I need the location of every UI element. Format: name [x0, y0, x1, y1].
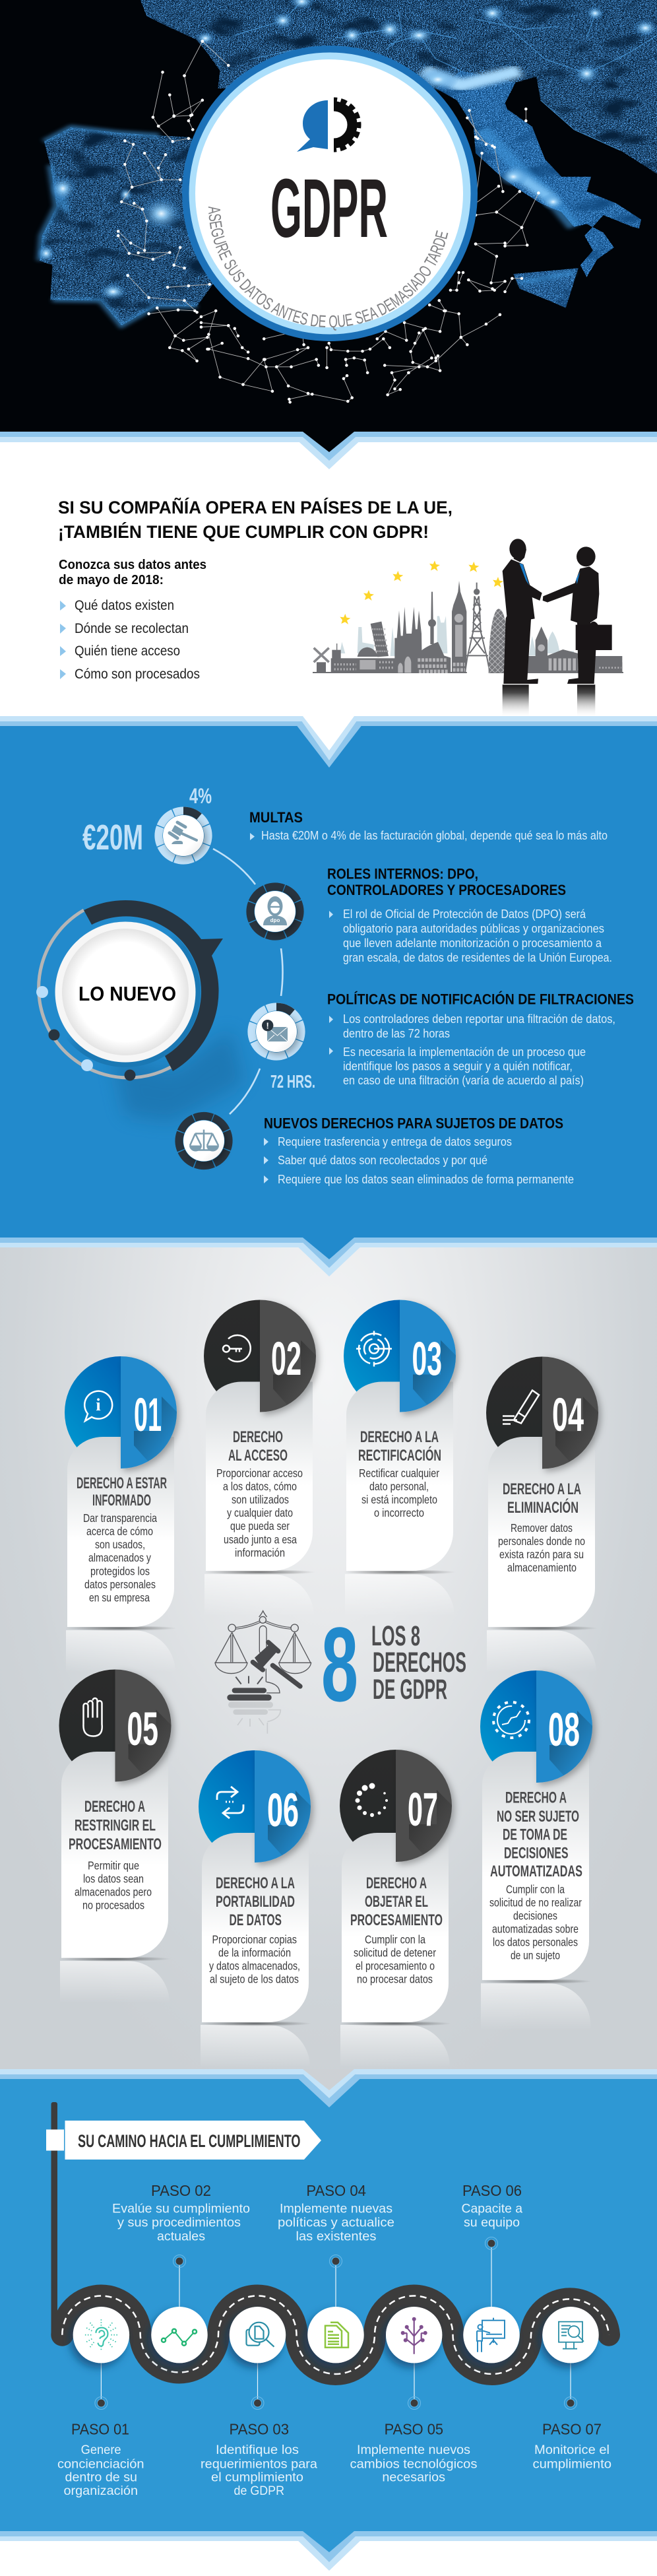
heading: los 8 derechos de gdpr: DERECHOS	[373, 1647, 466, 1678]
card 04: DERECHO A LA	[503, 1480, 581, 1498]
dark skyline buildings	[313, 581, 623, 673]
step 5 icon: circuit tree	[386, 2307, 442, 2363]
text: roles internos: El rol de Oficial de Protección de Datos (DPO) será	[343, 908, 586, 921]
card 06: DE DATOS	[230, 1911, 282, 1929]
step 1 text: dentro de su	[65, 2470, 137, 2484]
card 08: automatizadas sobre	[492, 1922, 579, 1935]
step 4 text: Implemente nuevas	[280, 2202, 392, 2216]
icon: scales and gavel	[215, 1611, 311, 1734]
card 08: DE TOMA DE	[503, 1826, 567, 1844]
text: politicas de notificacion	[327, 991, 634, 1087]
card 08: 08	[548, 1704, 580, 1756]
icon: dpo ring: dpo	[270, 917, 280, 923]
tie left	[519, 563, 529, 585]
central badge: GDPR	[270, 162, 388, 255]
card 01: almacenados y	[88, 1551, 151, 1564]
stars	[340, 560, 503, 624]
72 hours label: 72 HRS.	[270, 1071, 315, 1092]
icon: key	[223, 1335, 251, 1362]
icon: raised hand	[83, 1698, 102, 1736]
hero panel: night map of Europe	[0, 0, 657, 436]
text: roles internos: gran escala, de datos de residentes de la Unión Europea.	[343, 951, 612, 964]
icon: gear and trend	[493, 1702, 529, 1738]
heading: los 8 derechos de gdpr: DE GDPR	[373, 1674, 447, 1705]
step 2 text: Evalúe su cumplimiento	[112, 2202, 250, 2216]
card 04: almacenamiento	[507, 1561, 577, 1574]
text: roles internos	[327, 866, 612, 964]
briefcase	[576, 622, 612, 650]
step 1 text: concienciación	[57, 2457, 144, 2471]
step 4 icon: documents	[307, 2307, 364, 2363]
intro subheading: de mayo de 2018:	[59, 573, 164, 587]
text: nuevos derechos	[264, 1115, 574, 1186]
card 04: personales donde no	[498, 1535, 585, 1548]
card 01: Dar transparencia	[83, 1511, 157, 1525]
text: nuevos derechos: Saber qué datos son recolectados y por qué	[278, 1154, 487, 1167]
big number 8: 8	[321, 1605, 358, 1723]
card 06: de la información	[218, 1946, 291, 1959]
icon: scales ring	[172, 1109, 236, 1173]
card 07: DERECHO A	[366, 1874, 427, 1892]
text: roles internos: que lleven adelante monitorización o procesamiento a	[343, 937, 602, 950]
text: politicas de notificacion: dentro de las 72 horas	[343, 1027, 450, 1040]
step 6 text: Capacite a	[462, 2202, 522, 2216]
panel: lo nuevo background	[0, 719, 657, 1247]
card 01: i	[96, 1395, 101, 1414]
icon: gavel ring	[151, 803, 216, 868]
banner: su camino: SU CAMINO HACIA EL CUMPLIMIENTO	[78, 2131, 301, 2151]
card 01: DERECHO A ESTAR	[77, 1474, 167, 1492]
card 05: RESTRINGIR EL	[75, 1817, 156, 1835]
step 5 text: Implemente nuevos	[357, 2443, 470, 2457]
card 01: en su empresa	[89, 1591, 150, 1604]
card 04: Remover datos	[511, 1521, 573, 1535]
card 01: INFORMADO	[92, 1492, 151, 1509]
footer divider	[0, 2531, 657, 2576]
central badge: ASEGURE SUS DATOS ANTES DE QUE SEA DEMASIADO TARDE	[208, 206, 449, 331]
card 02: usado junto a esa	[224, 1533, 297, 1546]
map of lit land masses	[37, 0, 657, 325]
card 01	[65, 1356, 179, 1672]
text: roles internos: CONTROLADORES Y PROCESADORES	[327, 882, 566, 898]
step 3 text: requerimientos para	[201, 2457, 317, 2471]
card 02: DERECHO	[233, 1428, 283, 1446]
card 04: ELIMINACIÓN	[507, 1498, 579, 1517]
card 03: DERECHO A LA	[360, 1428, 439, 1446]
step 1 icon: ear	[73, 2307, 129, 2363]
step 5 text: necesarios	[382, 2470, 445, 2484]
card 03: RECTIFICACIÓN	[358, 1446, 441, 1465]
icon: transfer arrows	[217, 1787, 243, 1818]
card 05: DERECHO A	[84, 1798, 145, 1816]
step 6 icon: presenter	[463, 2307, 520, 2363]
step 1 text	[57, 2420, 144, 2498]
icon: target	[356, 1331, 392, 1366]
businessman right	[543, 546, 599, 684]
intro checklist: Cómo son procesados	[75, 667, 200, 682]
step 2 text: PASO 02	[151, 2182, 211, 2199]
businessman left	[503, 539, 542, 684]
text: multas: Hasta €20M o 4% de las facturación global, depende qué sea lo más alto	[261, 829, 608, 842]
icon: dpo ring	[243, 879, 307, 944]
card 02: información	[235, 1546, 285, 1559]
card 03: 03	[412, 1333, 442, 1385]
step 2 text: actuales	[157, 2229, 205, 2244]
step 1 text: organización	[63, 2484, 138, 2498]
card 07: solicitud de detener	[354, 1946, 436, 1959]
card 02: AL ACCESO	[228, 1447, 288, 1465]
card 02: son utilizados	[232, 1493, 289, 1506]
card 05: almacenados pero	[75, 1885, 152, 1898]
panel: camino background	[0, 2078, 657, 2534]
card 03: Rectificar cualquier	[359, 1467, 439, 1480]
card 07: el procesamiento o	[356, 1959, 435, 1972]
card 01: datos personales	[84, 1577, 156, 1591]
step 4 text: PASO 04	[306, 2182, 366, 2199]
card 04	[485, 1357, 600, 1672]
intro subheading	[59, 558, 206, 587]
intro checklist	[60, 598, 200, 682]
intro checklist: Dónde se recolectan	[75, 621, 189, 636]
card 08: DECISIONES	[504, 1845, 569, 1863]
step 3 text	[201, 2420, 317, 2498]
text: roles internos: ROLES INTERNOS: DPO,	[327, 866, 478, 882]
card 03: si está incompleto	[361, 1493, 437, 1506]
step 5 text: cambios tecnológicos	[350, 2457, 478, 2471]
card 08: los datos personales	[493, 1935, 578, 1948]
card 02: a los datos, cómo	[223, 1480, 297, 1493]
card 01: acerca de cómo	[86, 1525, 153, 1538]
card 02: y cualquier dato	[227, 1506, 293, 1519]
step 3 icon: search document	[230, 2307, 286, 2363]
divider lo nuevo to derechos	[0, 1238, 657, 1276]
intro panel background	[0, 436, 657, 719]
card 06: y datos almacenados,	[209, 1959, 300, 1972]
step 3 text: el cumplimiento	[211, 2470, 303, 2484]
step 2 text	[112, 2182, 250, 2244]
logo: speech bubble and gear	[297, 100, 358, 152]
icon: eraser	[503, 1390, 539, 1424]
step 4 text: políticas y actualice	[278, 2216, 394, 2230]
heading: los 8 derechos de gdpr	[371, 1620, 466, 1705]
text: nuevos derechos: NUEVOS DERECHOS PARA SUJETOS DE DATOS	[264, 1115, 563, 1132]
card 05: 05	[127, 1703, 158, 1756]
step 6 text	[462, 2182, 522, 2230]
card 08: AUTOMATIZADAS	[490, 1863, 582, 1880]
step 4 text: las existentes	[296, 2229, 377, 2244]
card 07: PROCESAMIENTO	[350, 1911, 443, 1929]
network of connected points	[118, 41, 538, 402]
card 08: DERECHO A	[505, 1789, 567, 1807]
card 01: son usados,	[95, 1538, 145, 1551]
card 02	[203, 1300, 318, 1616]
card 03	[344, 1300, 458, 1616]
card 06: al sujeto de los datos	[210, 1972, 299, 1985]
text: multas: MULTAS	[249, 809, 303, 826]
intro heading: ¡TAMBIÉN TIENE QUE CUMPLIR CON GDPR!	[58, 521, 429, 542]
card 02: Proporcionar acceso	[216, 1467, 303, 1480]
text: politicas de notificacion: en caso de una filtración (varía de acuerdo al país)	[343, 1074, 584, 1087]
step 4 text	[278, 2182, 394, 2244]
text: multas	[249, 809, 608, 842]
step 7 text	[533, 2420, 611, 2471]
text: roles internos: obligatorio para autoridades públicas y organizaciones	[343, 922, 604, 935]
icon: info bubble	[84, 1391, 112, 1421]
card 06	[199, 1750, 313, 2068]
20M label: €20M	[82, 818, 143, 857]
card 07	[339, 1750, 454, 2068]
text: politicas de notificacion: identifique los pasos a seguir y a quién notificar,	[343, 1060, 573, 1073]
step 5 text: PASO 05	[385, 2420, 443, 2437]
step 7 icon: monitor	[542, 2307, 599, 2363]
dial: lo nuevo	[36, 900, 244, 1122]
floor reflection	[503, 684, 595, 717]
intro subheading: Conozca sus datos antes	[59, 558, 206, 572]
card 05: no procesados	[82, 1898, 144, 1911]
card 01: 01	[134, 1389, 162, 1441]
curved tagline	[208, 206, 451, 327]
card 02: 02	[271, 1333, 301, 1385]
eiffel tower lattice	[465, 583, 490, 673]
step 2 text: y sus procedimientos	[117, 2216, 241, 2230]
step 7 text: Monitorice el	[534, 2443, 610, 2457]
step 5 text	[350, 2420, 478, 2484]
card 08: decisiones	[513, 1909, 557, 1922]
step 6 text: PASO 06	[462, 2182, 522, 2199]
intro heading	[58, 497, 453, 542]
card 06: Proporcionar copias	[212, 1932, 297, 1946]
panel: los 8 derechos background	[0, 1246, 657, 2072]
4 percent label: 4%	[189, 784, 212, 808]
card 06: DERECHO A LA	[216, 1874, 295, 1892]
reflection of gavel base	[228, 1701, 280, 1734]
step 6 text: su equipo	[464, 2216, 520, 2230]
lighter details	[360, 614, 545, 673]
text: nuevos derechos: Requiere trasferencia y entrega de datos seguros	[278, 1135, 512, 1148]
card 04: exista razón para su	[499, 1548, 584, 1561]
gherkin tower	[489, 609, 509, 673]
intro checklist: Quién tiene acceso	[75, 644, 180, 659]
card 08: solicitud de no realizar	[489, 1896, 582, 1909]
light background buildings	[340, 616, 574, 656]
road with pole	[51, 2102, 609, 2374]
step 7 text: cumplimiento	[533, 2457, 611, 2471]
intro heading: SI SU COMPAÑÍA OPERA EN PAÍSES DE LA UE,	[58, 497, 453, 517]
step 7 text: PASO 07	[542, 2420, 602, 2437]
card 06: PORTABILIDAD	[216, 1893, 295, 1911]
card 01: protegidos los	[90, 1564, 150, 1577]
step 1 text: Genere	[81, 2443, 121, 2457]
divider derechos to camino	[0, 2069, 657, 2107]
card 07: 07	[408, 1784, 438, 1836]
divider intro to lo nuevo	[0, 716, 657, 768]
icon: mail ring	[244, 999, 309, 1064]
card 03: o incorrecto	[374, 1506, 424, 1519]
step 3 text: Identifique los	[216, 2443, 299, 2457]
step 3 text: de GDPR	[234, 2484, 284, 2498]
card 05: los datos sean	[83, 1872, 144, 1885]
banner: su camino	[46, 2121, 321, 2160]
card 03: dato personal,	[369, 1480, 429, 1493]
text: nuevos derechos: Requiere que los datos sean eliminados de forma permanente	[278, 1173, 574, 1186]
card 08: de un sujeto	[511, 1948, 560, 1962]
illustration: European skyline and handshake	[313, 539, 623, 717]
card 08: Cumplir con la	[506, 1882, 565, 1896]
text: politicas de notificacion: Los controladores deben reportar una filtración de datos,	[343, 1012, 615, 1026]
card 08	[480, 1670, 594, 2030]
dial: lo nuevo: LO NUEVO	[78, 982, 176, 1005]
card 07: OBJETAR EL	[365, 1893, 428, 1911]
card 07: Cumplir con la	[365, 1932, 425, 1946]
central badge	[182, 46, 478, 341]
card 06: 06	[267, 1785, 299, 1837]
card 05: PROCESAMIENTO	[69, 1835, 162, 1853]
card 05	[59, 1670, 173, 2003]
connector pins	[95, 2237, 577, 2409]
card 08: NO SER SUJETO	[497, 1808, 579, 1826]
step 2 icon: chart	[151, 2307, 208, 2363]
intro checklist: Qué datos existen	[75, 598, 174, 613]
step 3 text: PASO 03	[230, 2420, 289, 2437]
bright road-like light lines	[235, 1, 657, 150]
text: politicas de notificacion: Es necesaria la implementación de un proceso que	[343, 1045, 586, 1059]
heading: los 8 derechos de gdpr: LOS 8	[371, 1620, 420, 1652]
card 02: que pueda ser	[230, 1519, 290, 1533]
card 05: Permitir que	[88, 1859, 139, 1872]
tie right	[576, 572, 580, 584]
card 04: 04	[552, 1389, 584, 1441]
divider hero to intro	[0, 432, 657, 469]
icon: mail ring: !	[266, 1020, 269, 1031]
step 1 text: PASO 01	[71, 2420, 129, 2437]
connector arcs	[213, 849, 282, 1114]
icon: ring of dots	[355, 1783, 388, 1817]
card 07: no procesar datos	[357, 1972, 433, 1985]
